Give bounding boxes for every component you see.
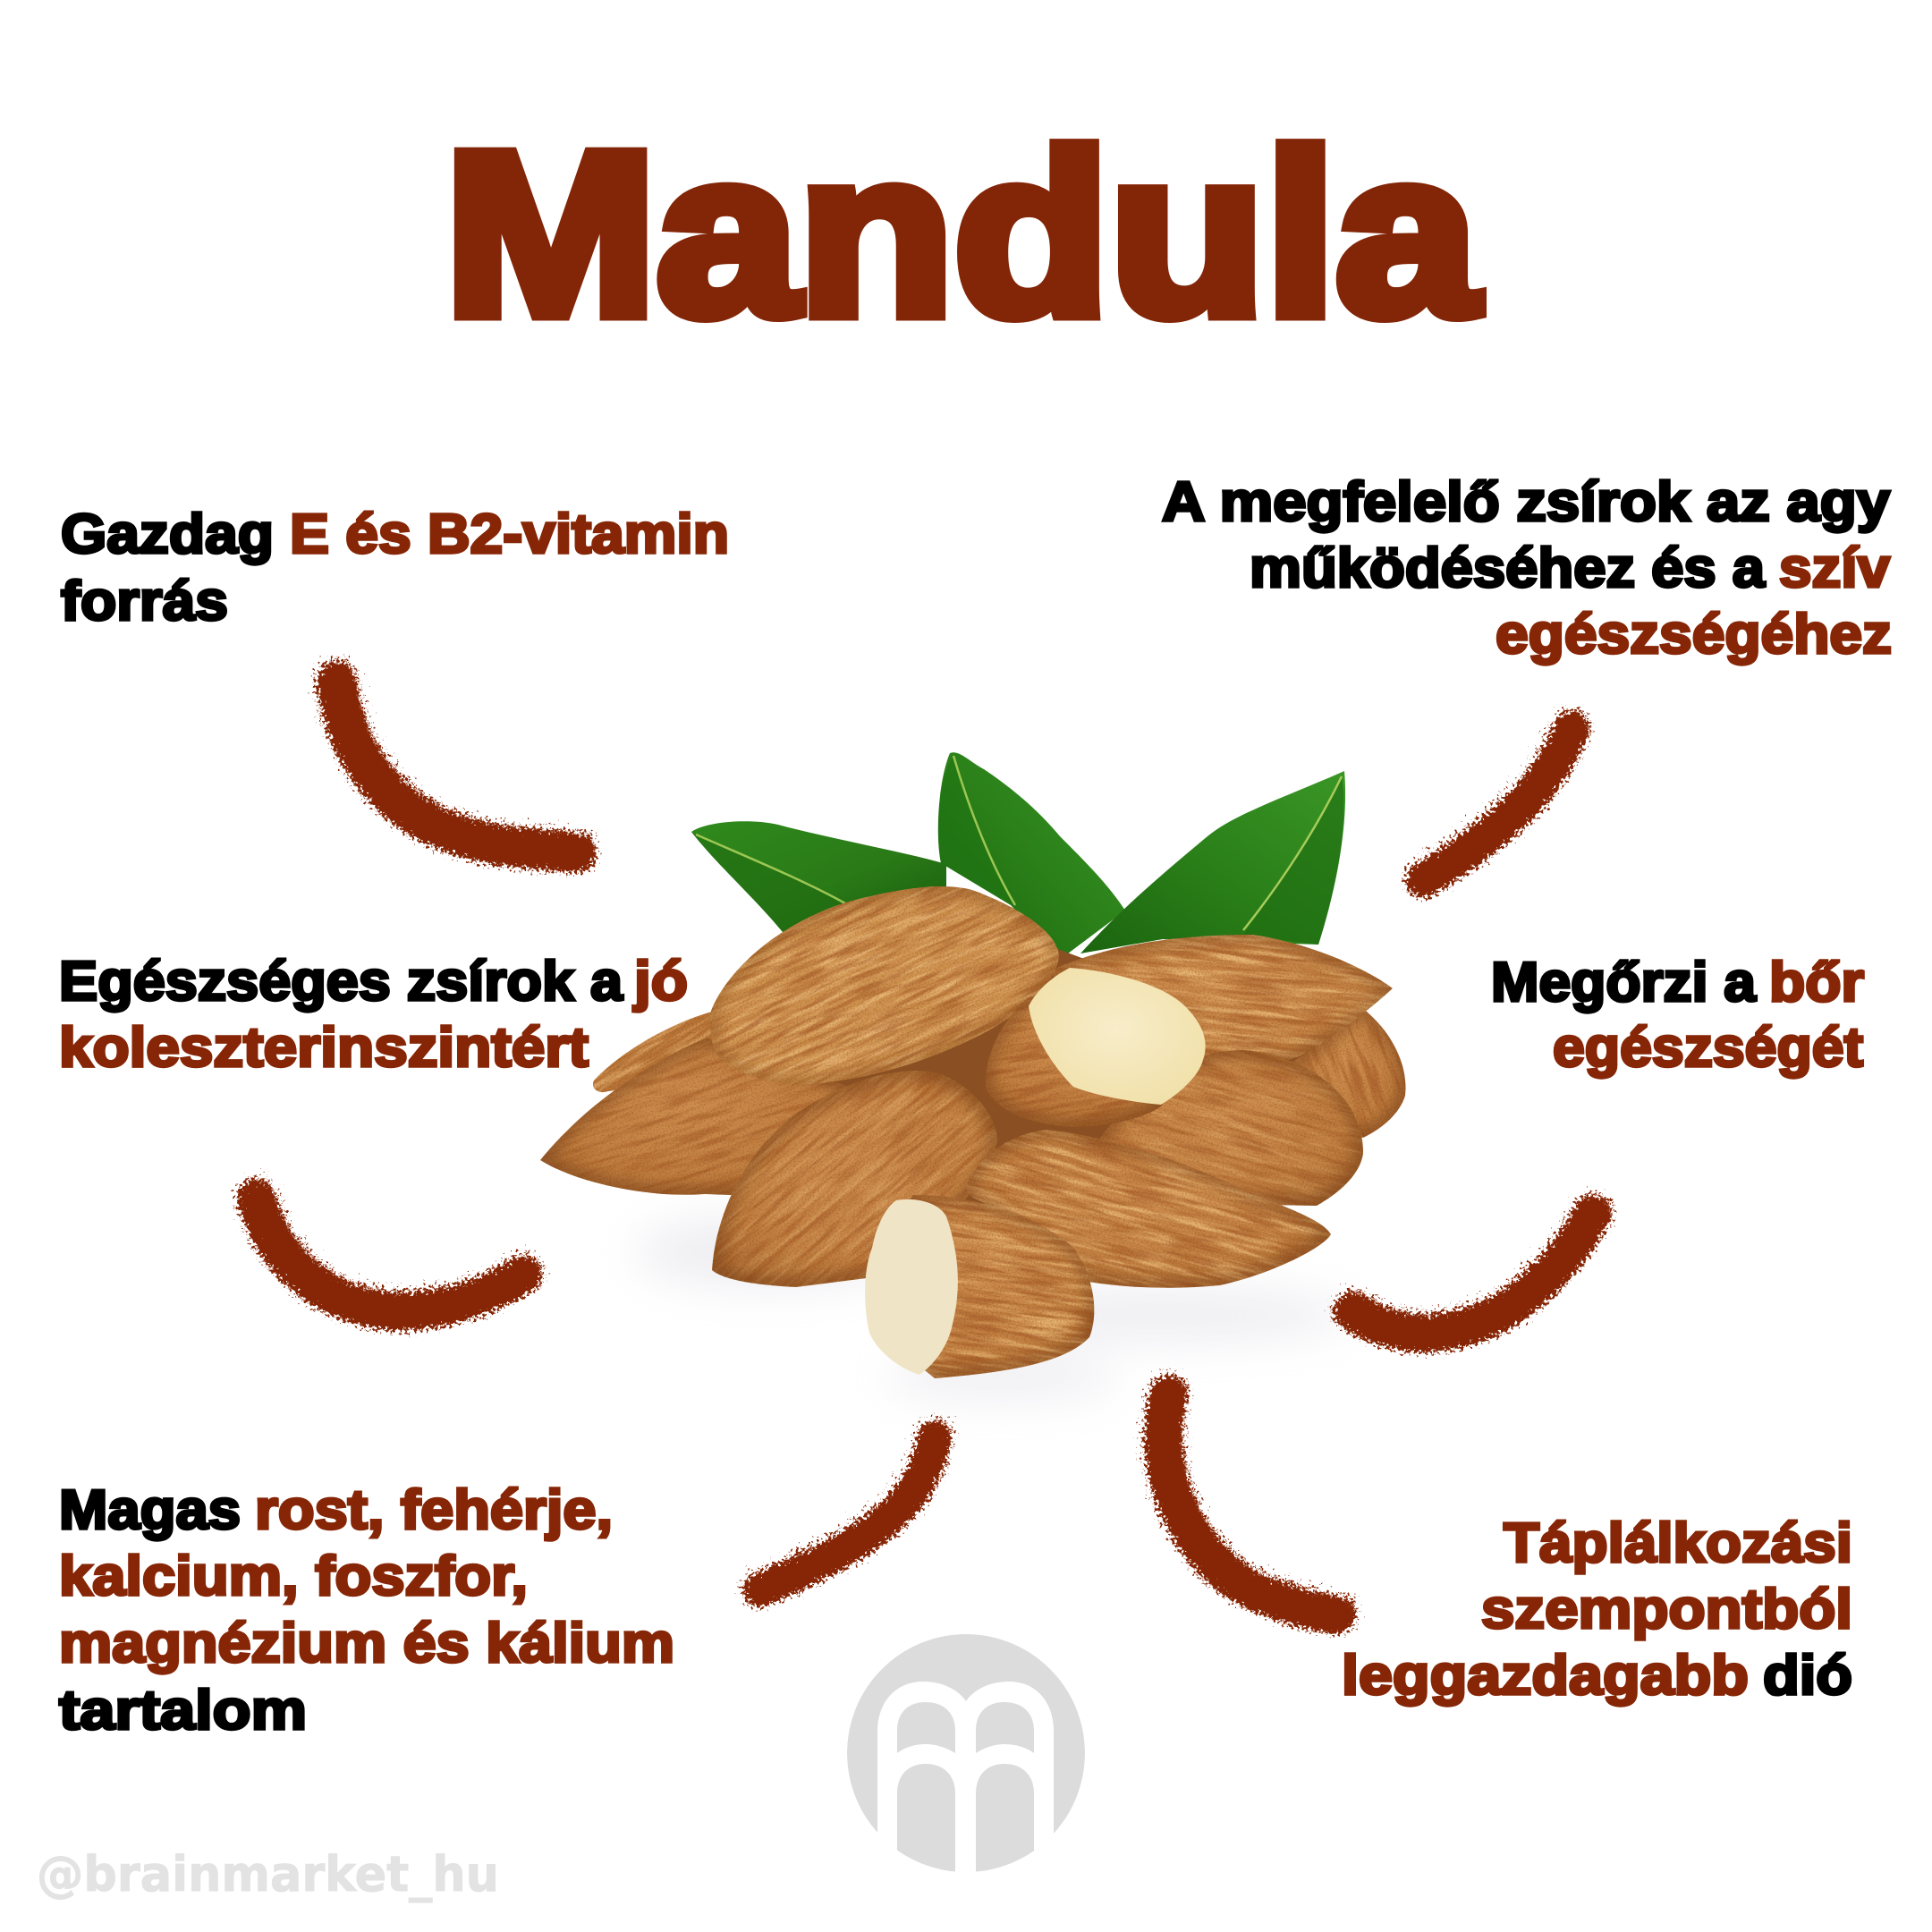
almond: front broken, skin: [911, 1195, 1095, 1378]
text block: skin health: Megőrzi a: [1491, 952, 1757, 1013]
text block: skin health: egészségét: [1553, 1017, 1863, 1079]
almond: top big: [710, 886, 1059, 1085]
text block: richest nut: [1342, 1513, 1852, 1707]
almond: broken centre top, skin: [986, 996, 1163, 1127]
text block: brain and heart: A megfelelő zsírok az agy: [1162, 471, 1891, 533]
text block: brain and heart: szív: [1779, 538, 1891, 599]
text block: skin health: bőr: [1769, 952, 1864, 1013]
text block: richest nut: leggazdagabb: [1342, 1645, 1749, 1707]
soft shadow: [635, 1216, 1351, 1399]
almond pile illustration: [454, 750, 1484, 1434]
almond: bottom right big: [966, 1130, 1331, 1288]
text block: brain and heart: működéséhez és a: [1250, 538, 1766, 599]
text block: vitamin source: E és B2-vitamin: [290, 504, 729, 565]
title: Mandula: [445, 105, 1479, 364]
icon: middle leaf: [938, 752, 1125, 959]
text block: minerals: kalcium, foszfor,: [59, 1546, 528, 1607]
icon: left leaf: [691, 821, 946, 932]
text block: richest nut: dió: [1763, 1645, 1852, 1707]
text block: minerals: Magas: [59, 1479, 241, 1541]
text block: brain and heart: egészségéhez: [1496, 604, 1892, 665]
text block: brain and heart: [1162, 471, 1892, 665]
text block: skin health: [1491, 952, 1864, 1079]
brush stroke arrow: top right: [1424, 730, 1571, 880]
text block: richest nut: Táplálkozási: [1504, 1513, 1852, 1574]
almond: left: [540, 1038, 847, 1195]
almond: white face, centre: [1029, 968, 1206, 1105]
text block: minerals: [59, 1479, 674, 1741]
text block: healthy fats: koleszterinszintért: [59, 1017, 589, 1079]
text block: vitamin source: [61, 504, 729, 632]
logo: [847, 1634, 1085, 1887]
text block: minerals: magnézium és kálium: [59, 1613, 674, 1674]
text block: healthy fats: jó: [633, 951, 688, 1013]
brush stroke arrow: bottom left: [760, 1438, 934, 1590]
brush stroke arrow: middle right: [1352, 1215, 1592, 1334]
brush stroke arrow: top left: [336, 682, 576, 853]
almond gap shadow: [716, 948, 1342, 1239]
text block: vitamin source: forrás: [61, 571, 228, 632]
watermark handle: @brainmarket_hu: [37, 1846, 499, 1902]
text block: healthy fats: Egészséges zsírok a: [59, 951, 623, 1013]
brush stroke arrow: middle left: [256, 1199, 522, 1312]
text block: minerals: tartalom: [59, 1680, 307, 1741]
text block: richest nut: szempontból: [1481, 1579, 1852, 1640]
almond: centre lower-left: [712, 1071, 997, 1287]
text block: healthy fats: [59, 951, 688, 1079]
almond: right big back: [1054, 935, 1393, 1061]
almond: far right back: [1293, 1011, 1406, 1138]
text block: minerals: rost, fehérje,: [255, 1479, 613, 1541]
almond: back sliver: [592, 1012, 712, 1093]
almond skin grain: [528, 877, 1413, 1386]
almond: right round: [1100, 1050, 1363, 1206]
almond: white face, front: [865, 1199, 958, 1375]
icon: right leaf: [1080, 771, 1345, 953]
brush stroke arrow: bottom right: [1163, 1395, 1336, 1615]
text block: vitamin source: Gazdag: [61, 504, 274, 565]
